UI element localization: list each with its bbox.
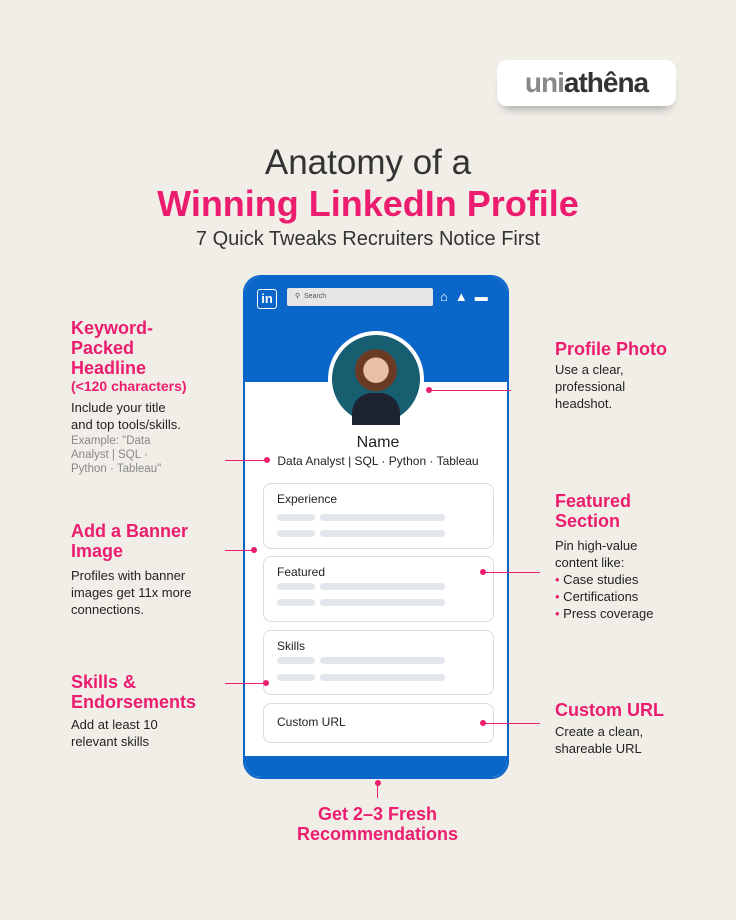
text: recommendations: Recommendations bbox=[297, 824, 458, 844]
text: keyword headline: Analyst | SQL · bbox=[71, 449, 148, 461]
phone mockup bbox=[243, 275, 509, 779]
text: profile photo bbox=[555, 339, 667, 411]
text: featured: • Case studies bbox=[555, 572, 638, 587]
title: 7 Quick Tweaks Recruiters Notice First bbox=[196, 228, 540, 250]
title bbox=[157, 143, 579, 250]
text: featured: Featured bbox=[555, 491, 631, 511]
photo bbox=[328, 331, 424, 427]
text: custom url: Custom URL bbox=[555, 700, 664, 720]
icon: linkedin: in bbox=[261, 291, 273, 306]
card: custom url: Custom URL bbox=[277, 715, 346, 729]
text: skills bbox=[71, 672, 196, 749]
text: profile photo: Use a clear, bbox=[555, 362, 624, 377]
text: keyword headline: Packed bbox=[71, 338, 134, 358]
text: banner: Add a Banner bbox=[71, 521, 188, 541]
card: experience bbox=[263, 483, 494, 549]
text: keyword headline: Python · Tableau" bbox=[71, 463, 161, 475]
text: profile photo: Profile Photo bbox=[555, 339, 667, 359]
logo: uniathêna bbox=[525, 67, 648, 98]
nav icons: ⌂▲▬ bbox=[440, 289, 495, 304]
text: profile photo: headshot. bbox=[555, 396, 612, 411]
text: skills: Skills & bbox=[71, 672, 136, 692]
card: experience: Experience bbox=[277, 492, 337, 506]
text: featured: Pin high-value bbox=[555, 538, 637, 553]
banner bbox=[245, 277, 511, 382]
text: custom url: Create a clean, bbox=[555, 724, 643, 739]
text: keyword headline: and top tools/skills. bbox=[71, 417, 181, 432]
text: featured: content like: bbox=[555, 555, 624, 570]
icon: linkedin bbox=[257, 289, 277, 309]
text: keyword headline: Example: "Data bbox=[71, 435, 151, 447]
text: custom url: shareable URL bbox=[555, 741, 642, 756]
logo bbox=[497, 60, 676, 106]
text: keyword headline bbox=[71, 318, 187, 475]
text: banner: images get 11x more bbox=[71, 585, 191, 600]
text: featured: • Certifications bbox=[555, 589, 638, 604]
text: featured bbox=[555, 491, 654, 621]
text: skills: Add at least 10 bbox=[71, 717, 158, 732]
text: banner: connections. bbox=[71, 602, 144, 617]
text: banner bbox=[71, 521, 191, 617]
search bar bbox=[287, 288, 433, 306]
card: skills bbox=[263, 630, 494, 695]
search bar: ⚲ Search bbox=[295, 293, 326, 300]
text: keyword headline: Include your title bbox=[71, 400, 166, 415]
text: recommendations: Get 2–3 Fresh bbox=[318, 804, 437, 824]
text: keyword headline: Headline bbox=[71, 358, 146, 378]
connectors bbox=[428, 390, 511, 391]
text: keyword headline: Keyword- bbox=[71, 318, 153, 338]
text: custom url bbox=[555, 700, 664, 756]
card: featured: Featured bbox=[277, 565, 325, 579]
title: Winning LinkedIn Profile bbox=[157, 183, 579, 224]
text: keyword headline: (<120 characters) bbox=[71, 378, 187, 394]
text: profile photo: professional bbox=[555, 379, 625, 394]
text: skills: relevant skills bbox=[71, 734, 149, 749]
name: Name bbox=[357, 434, 399, 451]
text: recommendations bbox=[297, 804, 458, 844]
card: custom url bbox=[263, 703, 494, 743]
title: Anatomy of a bbox=[265, 143, 471, 182]
text: featured: • Press coverage bbox=[555, 606, 654, 621]
card: skills: Skills bbox=[277, 639, 305, 653]
card: featured bbox=[263, 556, 494, 622]
text: banner: Image bbox=[71, 541, 123, 561]
phone mockup: Data Analyst | SQL · Python · Tableau bbox=[277, 454, 479, 468]
footer bar bbox=[245, 756, 511, 781]
text: banner: Profiles with banner bbox=[71, 568, 185, 583]
text: skills: Endorsements bbox=[71, 692, 196, 712]
text: featured: Section bbox=[555, 511, 620, 531]
